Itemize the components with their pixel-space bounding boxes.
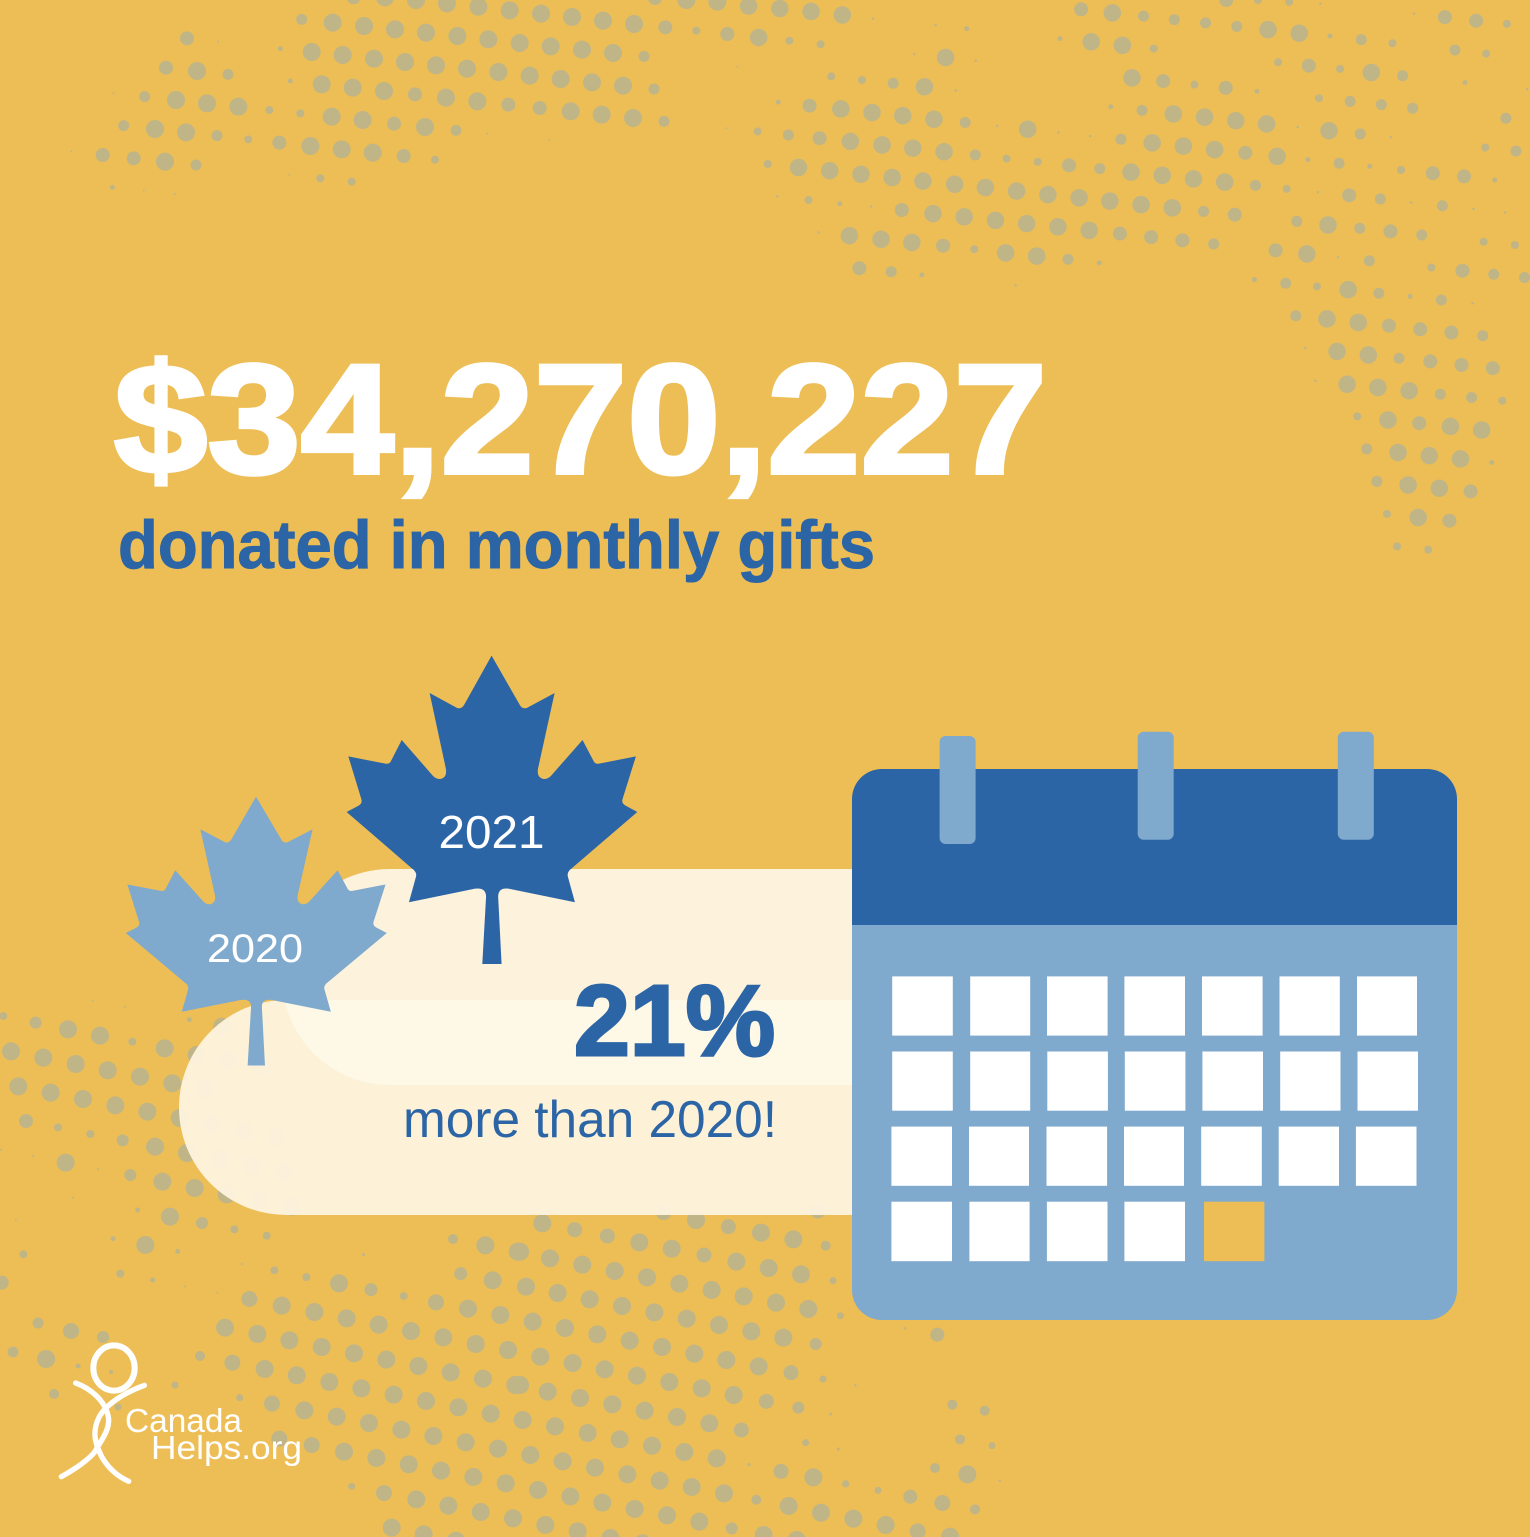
CanadaHelps logo [61, 1345, 302, 1481]
statistic caption: more than 2020! [403, 1091, 777, 1149]
dot pattern: behind logo [13, 1323, 200, 1407]
dot pattern: bottom right [846, 1328, 1000, 1537]
dot pattern: top centre [467, 0, 737, 140]
calendar icon [852, 732, 1457, 1320]
dot pattern: top left [71, 0, 457, 194]
maple leaf: 2021 [347, 656, 637, 964]
big number: $34,270,227 [114, 333, 1047, 507]
calendar day squares [891, 976, 1418, 1261]
maple leaf: 2021: 2021 [438, 806, 544, 858]
maple leaf: 2020: 2020 [207, 927, 303, 971]
dot pattern: top right [749, 0, 1527, 550]
logo figure [61, 1345, 144, 1481]
calendar body [852, 925, 1457, 1320]
CanadaHelps logo: Helps.org [151, 1429, 302, 1466]
subheading: donated in monthly gifts [118, 507, 875, 583]
calendar header [852, 769, 1457, 925]
highlighted calendar day [1204, 1202, 1264, 1261]
logo wordmark: Canada [125, 1402, 243, 1439]
maple leaf: 2020 [126, 797, 387, 1066]
calendar rings [940, 732, 1374, 844]
dot pattern: left [1, 1001, 292, 1293]
lower cream pill [179, 1000, 959, 1215]
dot pattern: bottom centre right [520, 1211, 846, 1537]
statistic: 21%: 21% [574, 965, 775, 1077]
upper cream pill [282, 869, 962, 1085]
dot pattern: bottom centre left [201, 1239, 518, 1537]
